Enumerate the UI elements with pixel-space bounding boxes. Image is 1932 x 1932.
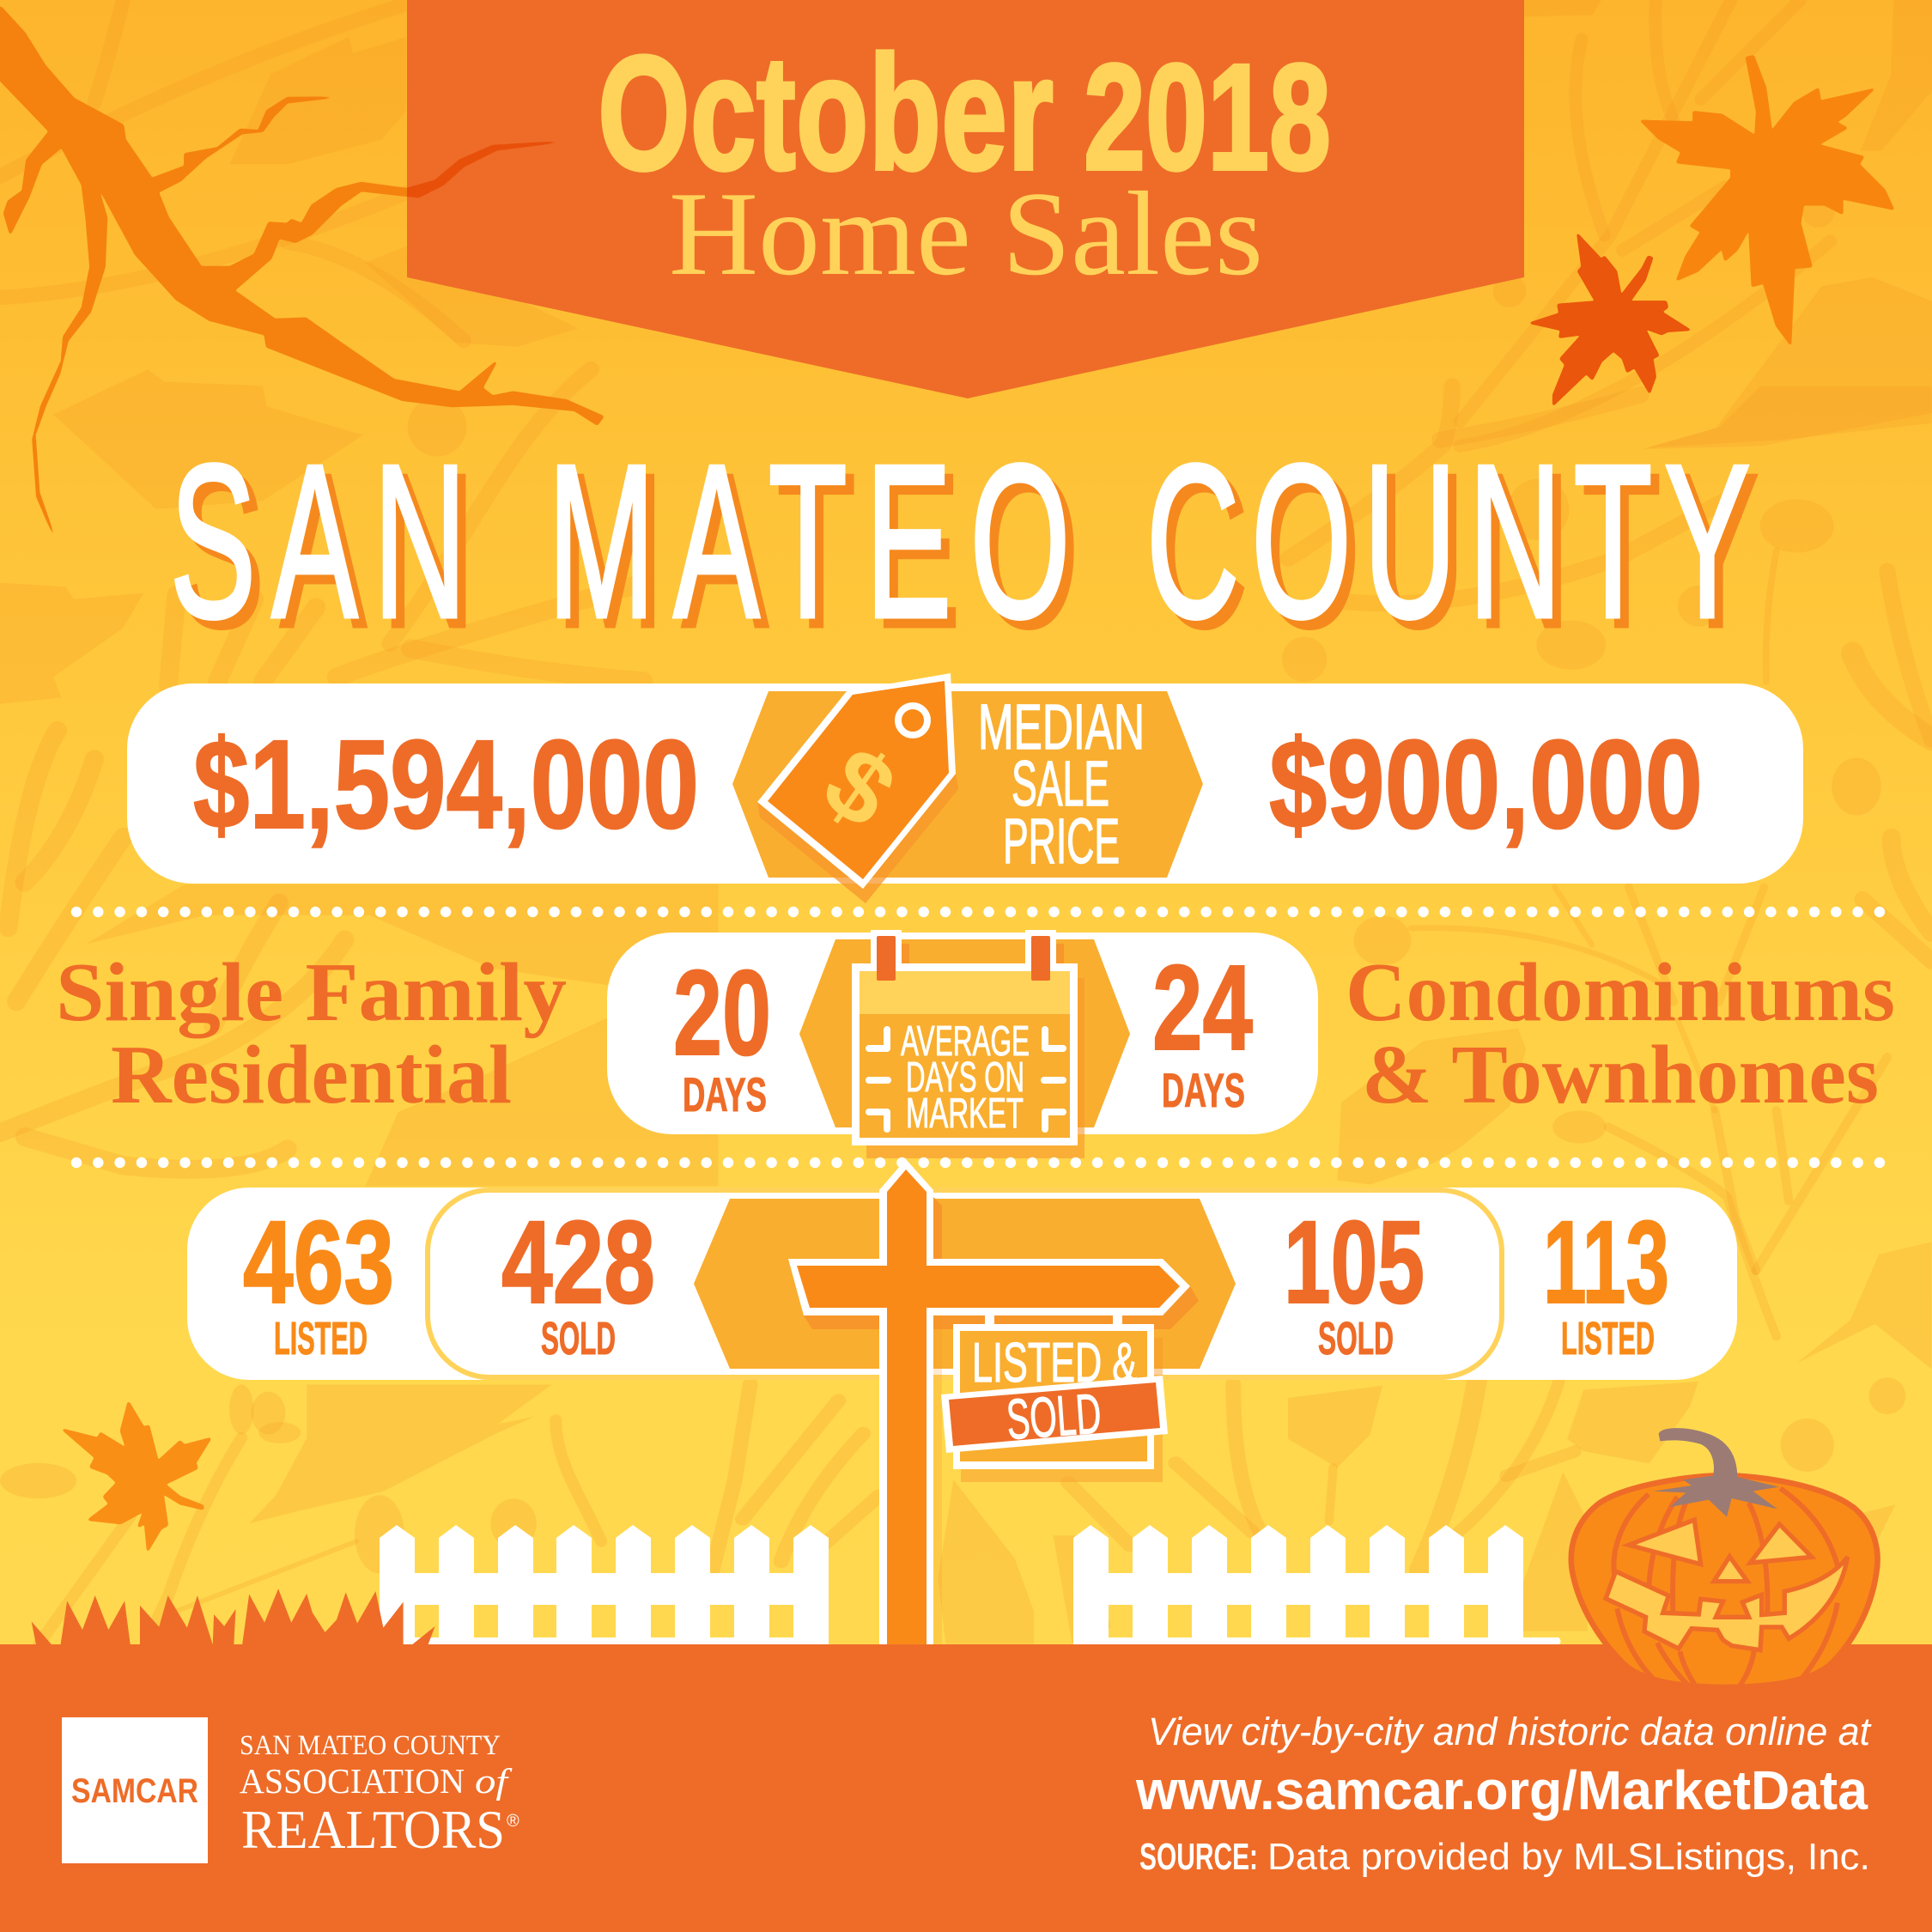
footer call to action: [1135, 1710, 1872, 1878]
maple leaf small: [1529, 234, 1691, 405]
label: median sale price: MEDIAN: [978, 691, 1145, 762]
footer call to action: www.samcar.org/MarketData: [1135, 1759, 1868, 1821]
single family sold: [501, 1197, 655, 1364]
condo sold: SOLD: [1318, 1313, 1394, 1364]
left lower foliage: [0, 1384, 552, 1573]
county heading: MATEO: [548, 420, 1070, 664]
county heading: MATEO: [556, 429, 1078, 673]
maple leaf large: [1641, 56, 1893, 345]
single family median price: $1,594,000: [193, 714, 699, 855]
panel: median sale price: [127, 673, 1803, 903]
single family days: 20: [673, 945, 771, 1080]
lower centre foliage: [712, 1384, 1260, 1571]
condo median price: $900,000: [1269, 714, 1703, 855]
condo listed: LISTED: [1561, 1313, 1655, 1364]
hanging sign: listed and sold: LISTED &: [972, 1331, 1137, 1394]
icon: price tag: [757, 673, 958, 903]
footer call to action: Data provided by MLSListings, Inc.: [1267, 1836, 1870, 1878]
label: single family residential: [56, 946, 567, 1121]
logo text: association name: ®: [507, 1812, 519, 1831]
footer call to action: View city-by-city and historic data online at: [1148, 1710, 1872, 1753]
label: average days on market: AVERAGE: [901, 1018, 1030, 1065]
label: median sale price: [978, 691, 1145, 877]
county heading: COUNTY: [1146, 420, 1750, 664]
logo: SAMCAR square: SAMCAR: [71, 1772, 198, 1810]
icon: jack-o-lantern: [1571, 1428, 1878, 1689]
single family listed: [243, 1197, 394, 1364]
single family listed: LISTED: [274, 1313, 368, 1364]
condo days: [1152, 939, 1253, 1117]
label: median sale price: PRICE: [1003, 805, 1120, 877]
picket fence left: [380, 1525, 829, 1645]
icon: calendar: [852, 930, 1084, 1158]
label: condominiums and townhomes: [1346, 946, 1895, 1121]
hanging sign: listed and sold: [941, 1315, 1168, 1482]
label: single family residential: Single Family: [56, 946, 567, 1038]
panel: listed and sold: [187, 1188, 1737, 1380]
footer call to action: SOURCE:: [1139, 1836, 1258, 1878]
county heading: SAN: [179, 429, 475, 673]
branch tip over banner: [407, 142, 555, 197]
label: condominiums and townhomes: & Townhomes: [1362, 1029, 1879, 1121]
grass: [32, 1589, 435, 1646]
label: average days on market: MARKET: [906, 1091, 1024, 1137]
condo sold: [1284, 1197, 1425, 1364]
right lower foliage: [1288, 1020, 1932, 1631]
county heading: COUNTY: [1155, 429, 1759, 673]
right middle foliage: [1282, 386, 1932, 1002]
tree branch: [0, 6, 604, 540]
maple leaf lower left: [62, 1401, 211, 1552]
single family days: [673, 945, 771, 1121]
condo listed: [1543, 1197, 1669, 1364]
panel: average days on market: [607, 930, 1318, 1158]
single family listed: 463: [243, 1197, 394, 1328]
title: October 2018: 2018: [1084, 33, 1331, 202]
title: October 2018: October: [598, 22, 1054, 204]
label: median sale price: SALE: [1012, 748, 1109, 819]
county heading: SAN: [170, 420, 466, 664]
single family sold: 428: [501, 1197, 655, 1328]
condo listed: 113: [1543, 1197, 1669, 1328]
single family days: DAYS: [683, 1067, 767, 1121]
label: average days on market: DAYS ON: [906, 1054, 1024, 1101]
label: condominiums and townhomes: Condominiums: [1346, 946, 1895, 1038]
icon: price tag: $: [804, 725, 915, 850]
dotted divider 2: [76, 1157, 1885, 1168]
condo days: 24: [1152, 939, 1253, 1075]
subtitle: Home Sales: Home Sales: [669, 167, 1263, 301]
logo text: association name: SAN MATEO COUNTY: [240, 1730, 501, 1761]
dotted divider 1: [76, 907, 1885, 917]
logo text: association name: [240, 1730, 519, 1860]
label: average days on market: [901, 1018, 1030, 1137]
condo days: DAYS: [1162, 1063, 1245, 1117]
logo text: association name: of: [475, 1761, 513, 1801]
logo text: association name: REALTORS: [241, 1799, 505, 1860]
top banner: [407, 0, 1524, 398]
icon: signpost: [788, 1159, 1199, 1645]
left middle foliage: [0, 583, 718, 1186]
picket fence right: [1073, 1525, 1561, 1645]
footer band: [0, 1644, 1932, 1932]
hanging sign: listed and sold: SOLD: [1005, 1381, 1103, 1451]
county heading: [170, 420, 1759, 673]
condo sold: 105: [1284, 1197, 1425, 1328]
logo text: association name: ASSOCIATION: [240, 1761, 465, 1801]
label: single family residential: Residential: [111, 1029, 512, 1121]
single family sold: SOLD: [541, 1313, 616, 1364]
logo: SAMCAR square: [62, 1717, 208, 1863]
